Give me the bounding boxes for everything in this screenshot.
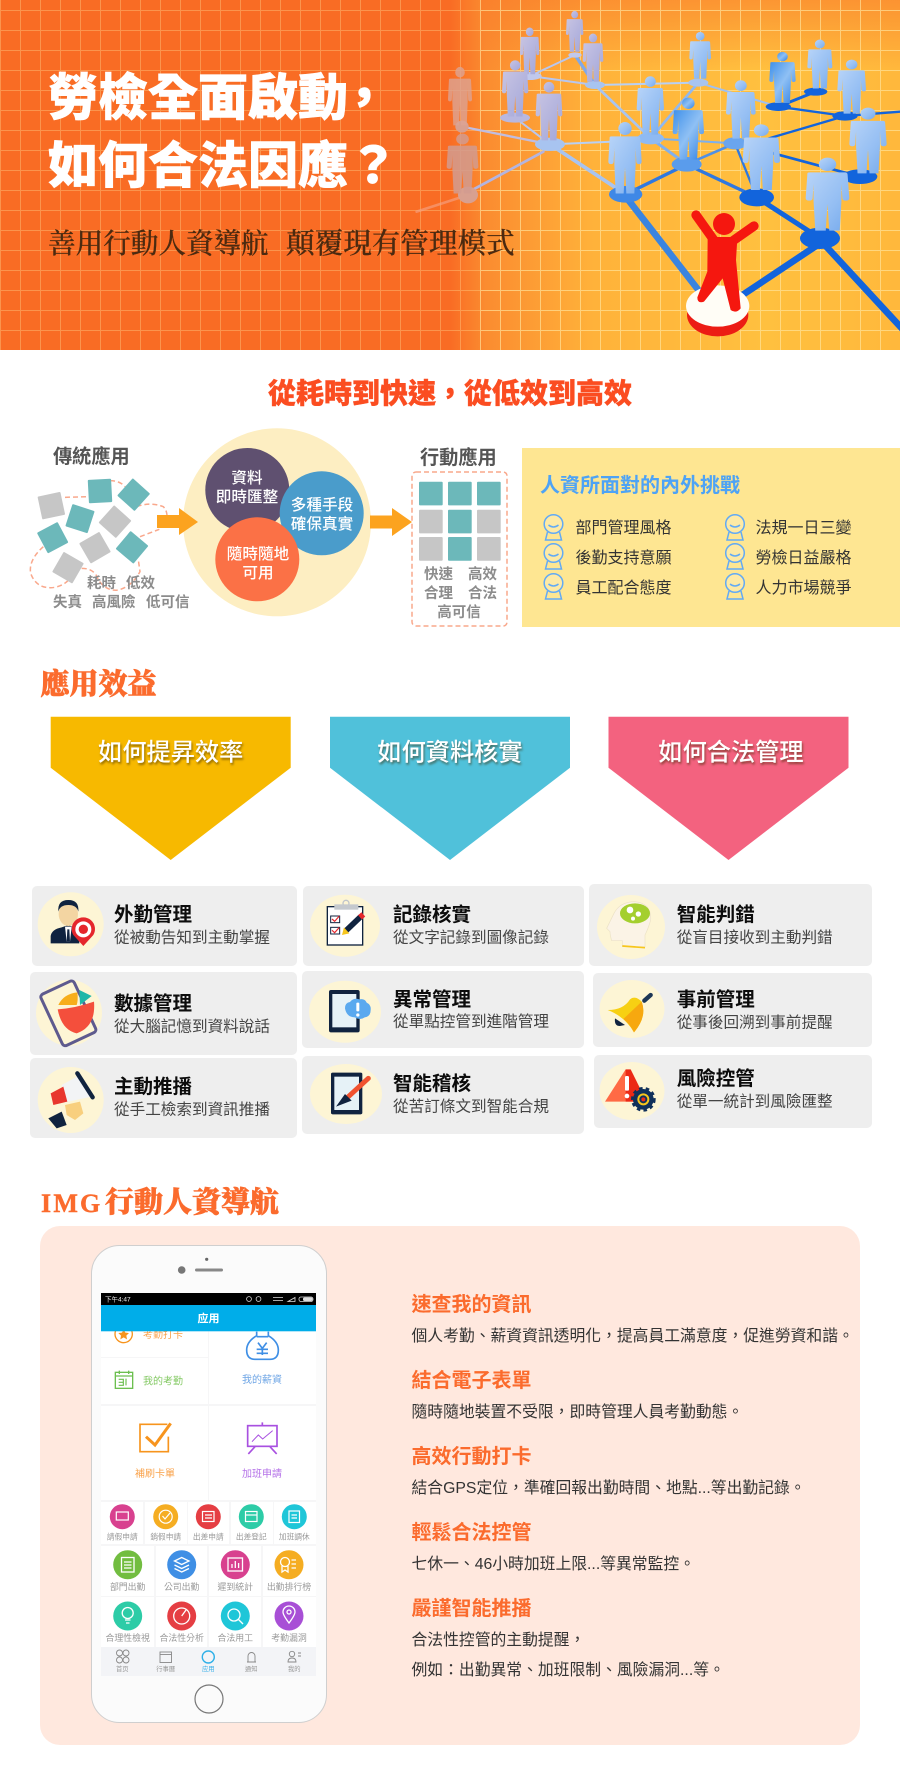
pentagon: verification <box>330 717 570 860</box>
feature: e-forms: 結合電子表單 <box>412 1369 532 1392</box>
venn circles: 可用 <box>242 565 274 582</box>
phone screen: 加班申請 <box>242 1467 282 1480</box>
feature: smart push <box>412 1597 725 1679</box>
feature: quick lookup: 速查我的資訊 <box>412 1292 532 1316</box>
row of four app icons: 出勤排行榜 <box>267 1581 311 1592</box>
hero banner <box>0 0 900 350</box>
feature: compliance control: 七休一、46小時加班上限...等異常監控。 <box>412 1554 695 1573</box>
row of four analysis icons: 合法用工 <box>218 1632 253 1643</box>
card: proactive push: 主動推播 <box>114 1076 193 1098</box>
card: smart audit: 智能稽核 <box>393 1072 472 1095</box>
phone screen: 我的考勤 <box>143 1374 183 1388</box>
tab bar: 应用 <box>202 1664 215 1673</box>
mobile box: 高效 <box>468 565 497 583</box>
feature: e-forms <box>412 1369 743 1421</box>
icon: warning with gear <box>605 1069 654 1110</box>
arrow <box>370 508 412 536</box>
tab bar: 我的 <box>288 1664 301 1673</box>
pentagon: compliance: 如何合法管理 <box>658 740 804 766</box>
phone screen: 補刷卡單 <box>135 1467 175 1480</box>
feature: compliance control <box>412 1520 695 1573</box>
feature: smart push: 合法性控管的主動提醒， <box>412 1630 585 1649</box>
feature: quick lookup: 個人考勤、薪資資訊透明化，提高員工滿意度，促進勞資和諧。 <box>412 1326 854 1345</box>
phone mockup <box>92 1246 326 1722</box>
illustration: people network <box>417 11 900 336</box>
row of four analysis icons <box>106 1602 307 1643</box>
row of five app icons: 出差登記 <box>236 1532 267 1542</box>
heading: IMG: IMG <box>41 1189 102 1218</box>
traditional drawbacks text <box>53 574 190 611</box>
mobile box: 合法 <box>468 584 497 602</box>
tab bar: 行事曆 <box>156 1664 175 1673</box>
tab bar: 通知 <box>245 1664 258 1673</box>
app header: 应用 <box>198 1311 220 1325</box>
row of four app icons: 公司出勤 <box>164 1581 200 1592</box>
venn circles <box>183 428 371 616</box>
hero gradient background <box>0 0 900 350</box>
traditional drawbacks text: 失真 <box>53 593 82 611</box>
card: record verification: 記錄核實 <box>393 903 471 926</box>
mobile box: 高可信 <box>437 603 481 621</box>
card: smart error detection: 從盲目接收到主動判錯 <box>677 929 833 947</box>
feature: compliance control: 輕鬆合法控管 <box>412 1520 532 1544</box>
pentagon: verification: 如何資料核實 <box>377 740 523 766</box>
row of four app icons <box>110 1550 311 1592</box>
panel heading: 人資所面對的內外挑戰 <box>540 473 740 497</box>
feature: mobile clock-in: 結合GPS定位，準確回報出勤時間、地點...等出勤記錄。 <box>412 1478 806 1497</box>
panel: IMG navigator <box>40 1226 860 1745</box>
heading: IMG <box>41 1184 279 1219</box>
phone screen: 考勤打卡 <box>143 1328 183 1341</box>
traditional drawbacks text: 低可信 <box>146 593 190 611</box>
card: smart error detection: 智能判錯 <box>677 903 755 926</box>
hero subtitle <box>48 228 515 260</box>
card: smart audit <box>302 1056 584 1134</box>
panel: HR challenges <box>522 448 900 627</box>
row of five app icons: 請假申請 <box>107 1532 138 1542</box>
venn circles: 資料 <box>231 468 263 487</box>
hero title: 如何合法因應？ <box>48 138 398 194</box>
card: record verification <box>303 886 584 966</box>
left list: 部門管理風格 <box>576 518 672 537</box>
pentagon: compliance <box>608 717 848 860</box>
status bar <box>101 1293 316 1305</box>
traditional drawbacks text: 耗時 <box>87 575 116 592</box>
row of four app icons: 部門出勤 <box>110 1581 146 1592</box>
venn circles: 多種手段 <box>291 495 354 514</box>
hero subtitle: 善用行動人資導航 <box>48 228 269 259</box>
traditional drawbacks text: 高風險 <box>92 593 136 611</box>
feature: e-forms: 隨時隨地裝置不受限，即時管理人員考勤動態。 <box>412 1402 743 1421</box>
card: exception management: 從單點控管到進階管理 <box>393 1012 549 1031</box>
card: data management: 從大腦記憶到資料說話 <box>114 1018 270 1036</box>
icon: clipboard <box>327 900 363 945</box>
row of five app icons <box>107 1504 310 1542</box>
mobile box: 合理 <box>424 584 453 602</box>
card: smart audit: 從苦訂條文到智能合規 <box>393 1098 549 1116</box>
icon: bell <box>608 995 651 1032</box>
pentagon: efficiency: 如何提昇效率 <box>98 740 243 766</box>
feature: mobile clock-in: 高效行動打卡 <box>412 1444 532 1468</box>
feature: smart push: 嚴謹智能推播 <box>412 1597 532 1620</box>
right list: 勞檢日益嚴格 <box>756 549 852 567</box>
venn circles: 隨時隨地 <box>227 544 290 563</box>
left list <box>544 515 672 599</box>
card: risk control: 風險控管 <box>677 1067 755 1090</box>
row of four app icons: 遲到統計 <box>218 1581 253 1592</box>
pentagon: efficiency <box>51 717 291 860</box>
card: risk control <box>594 1055 872 1128</box>
row of four analysis icons: 考勤漏洞 <box>271 1632 307 1643</box>
row of four analysis icons: 合理性檢視 <box>106 1632 150 1643</box>
phone screen: 我的薪資 <box>242 1373 282 1386</box>
row of five app icons: 銷假申請 <box>150 1532 181 1542</box>
scattered squares <box>30 478 167 590</box>
hero title <box>48 70 398 194</box>
row of four analysis icons: 合法性分析 <box>160 1632 204 1643</box>
icon: megaphone <box>48 1073 93 1128</box>
right list: 法規一日三變 <box>756 519 852 537</box>
card: field management: 從被動告知到主動掌握 <box>114 929 270 947</box>
icon: red figure on pedestal <box>686 213 754 336</box>
tab bar <box>101 1647 316 1676</box>
card: field management <box>32 886 297 966</box>
feature: quick lookup <box>412 1292 854 1345</box>
card: preventive management <box>593 973 872 1047</box>
card: exception management <box>302 971 584 1048</box>
card: proactive push <box>30 1058 297 1138</box>
left list: 員工配合態度 <box>576 579 672 597</box>
icon: agent with pin <box>51 900 95 946</box>
card: exception management: 異常管理 <box>393 988 471 1011</box>
left list: 後勤支持意願 <box>576 548 672 567</box>
row of five app icons: 出差申請 <box>193 1532 224 1542</box>
app header <box>101 1305 316 1331</box>
heading: traditional: 傳統應用 <box>53 445 130 468</box>
right list: 人力市場競爭 <box>756 579 852 597</box>
heading: mobile: 行動應用 <box>420 446 497 469</box>
card: proactive push: 從手工檢索到資訊推播 <box>114 1101 270 1119</box>
feature: smart push: 例如：出勤異常、加班限制、風險漏洞...等。 <box>412 1660 725 1679</box>
heading: from slow to fast: 從耗時到快速，從低效到高效 <box>268 377 632 409</box>
card: preventive management: 從事後回溯到事前提醒 <box>677 1014 833 1032</box>
icon: head with gears <box>607 902 651 948</box>
status bar: 下午4:47 <box>105 1294 131 1304</box>
right list <box>726 515 852 599</box>
icon: tablet with pen <box>331 1073 368 1114</box>
arrow <box>157 508 198 535</box>
heading: benefits: 應用效益 <box>40 667 158 701</box>
venn circles: 即時匯整 <box>216 488 279 506</box>
hero title: 勞檢全面啟動， <box>48 70 389 126</box>
phone screen <box>101 1293 316 1676</box>
icon: tablet alert <box>329 990 371 1032</box>
card: data management <box>30 972 297 1055</box>
home button <box>195 1685 223 1713</box>
venn circles: 確保真實 <box>291 515 353 533</box>
card: data management: 數據管理 <box>114 992 192 1015</box>
panel: traditional to mobile diagram <box>30 428 507 626</box>
traditional drawbacks text: 低效 <box>126 574 155 592</box>
card: record verification: 從文字記錄到圖像記錄 <box>393 929 549 947</box>
heading: IMG: 行動人資導航 <box>105 1184 279 1219</box>
mobile box <box>412 472 507 626</box>
tab bar: 首页 <box>116 1664 129 1673</box>
card: preventive management: 事前管理 <box>677 988 755 1011</box>
top app tiles <box>115 1325 278 1454</box>
card: risk control: 從單一統計到風險匯整 <box>677 1093 833 1111</box>
card: field management: 外勤管理 <box>114 903 192 926</box>
card: smart error detection <box>589 884 872 966</box>
row of five app icons: 加班調休 <box>279 1532 310 1542</box>
mobile box: 快速 <box>424 565 453 583</box>
hero subtitle: 顛覆現有管理模式 <box>286 228 515 260</box>
icon: tablet with pie chart <box>40 980 97 1047</box>
feature: mobile clock-in <box>412 1444 806 1497</box>
